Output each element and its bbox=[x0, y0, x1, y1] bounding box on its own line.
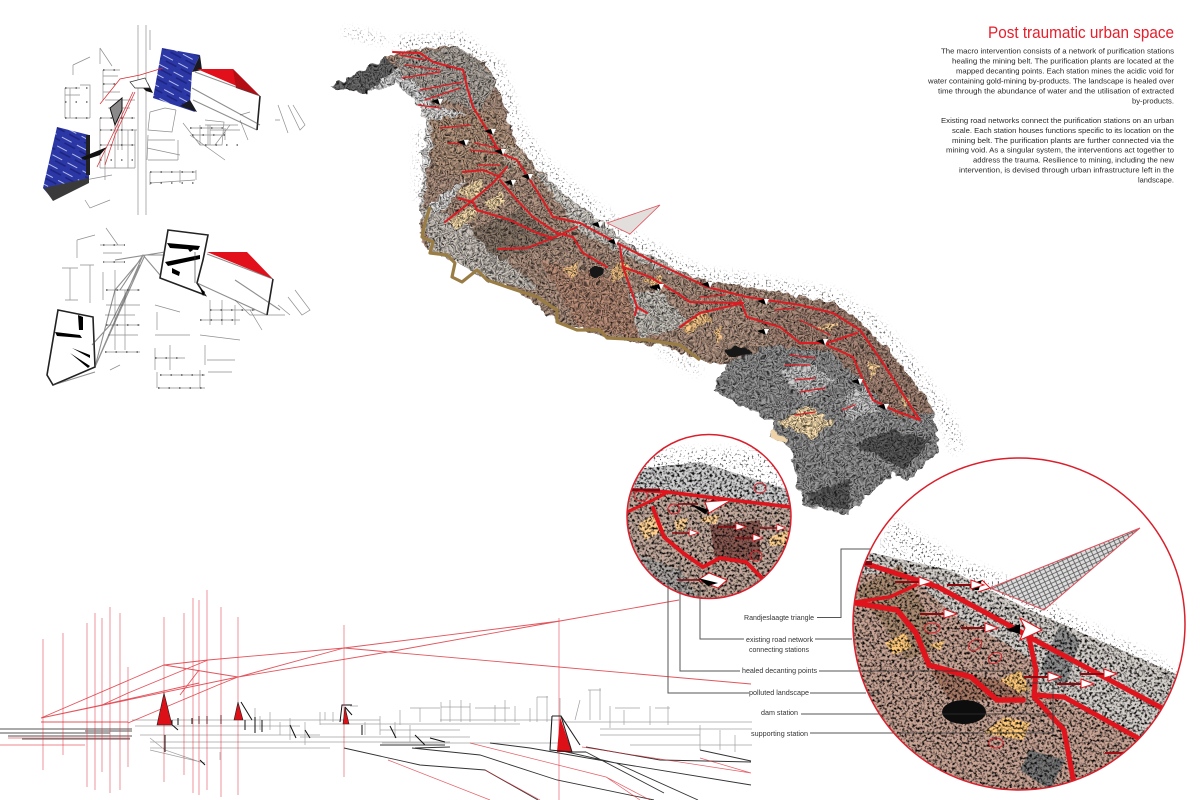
leader lines to labels bbox=[668, 549, 1079, 733]
label: existing road network: connecting stations bbox=[749, 645, 809, 654]
text block: macro intervention: mapped decanting points. Each station mines the acidic void for bbox=[956, 66, 1175, 76]
text block: road networks: scale. Each station houses functions specific to its location on the bbox=[952, 126, 1174, 135]
text block: road networks: mining void. As a singular system, the interventions act together to bbox=[946, 146, 1174, 154]
text block: macro intervention bbox=[927, 46, 1175, 106]
zoom circle: large detail bbox=[850, 458, 1190, 800]
text block: road networks: Existing road networks connect the purification stations on an urban bbox=[941, 116, 1174, 125]
label: supporting station: supporting station bbox=[751, 729, 808, 738]
label: existing road network: existing road network bbox=[746, 635, 813, 644]
text block: road networks: mining belt. The purification plants are further connected via the bbox=[952, 136, 1174, 145]
text block: macro intervention: The macro intervention consists of a network of purification stations bbox=[941, 46, 1174, 56]
river bbox=[422, 207, 700, 360]
text block: macro intervention: time through the abundance of water and the utilisation of extracted bbox=[938, 86, 1174, 96]
text block: macro intervention: water containing gold-mining by-products. The landscape is healed over bbox=[927, 76, 1175, 86]
skyline section drawing bbox=[0, 590, 752, 800]
title: Post traumatic urban space bbox=[988, 23, 1174, 42]
text block: macro intervention: by-products. bbox=[1132, 96, 1174, 106]
sketch: black outline plan bbox=[47, 228, 310, 388]
text block: macro intervention: healing the mining belt. The purification plants are located at the bbox=[952, 56, 1174, 66]
text block: road networks: address the trauma. Resilience to mining, including the new bbox=[973, 156, 1175, 164]
text block: road networks bbox=[941, 116, 1175, 184]
label: healed decanting points: healed decanting points bbox=[742, 666, 817, 675]
label: existing road network bbox=[746, 635, 813, 654]
zoom circle: small detail bbox=[620, 434, 800, 600]
label: dam station: dam station bbox=[761, 708, 798, 717]
skyline: red survey lines bbox=[0, 590, 751, 800]
map: mining belt bbox=[330, 45, 940, 516]
text block: road networks: intervention, is devised through urban infrastructure left in the bbox=[959, 166, 1174, 174]
label: Randjeslaagte triangle: Randjeslaagte triangle bbox=[744, 613, 814, 622]
map: road network bbox=[393, 52, 920, 420]
skyline: red station markers bbox=[157, 693, 586, 752]
map: Randjeslaagte triangle bbox=[607, 205, 660, 234]
skyline: black ground and building strokes bbox=[0, 688, 752, 800]
label: polluted landscape: polluted landscape bbox=[749, 688, 809, 697]
map speckle halo bbox=[345, 32, 958, 450]
text block: road networks: landscape. bbox=[1138, 176, 1174, 184]
sketch: blue massing plan bbox=[43, 25, 305, 215]
